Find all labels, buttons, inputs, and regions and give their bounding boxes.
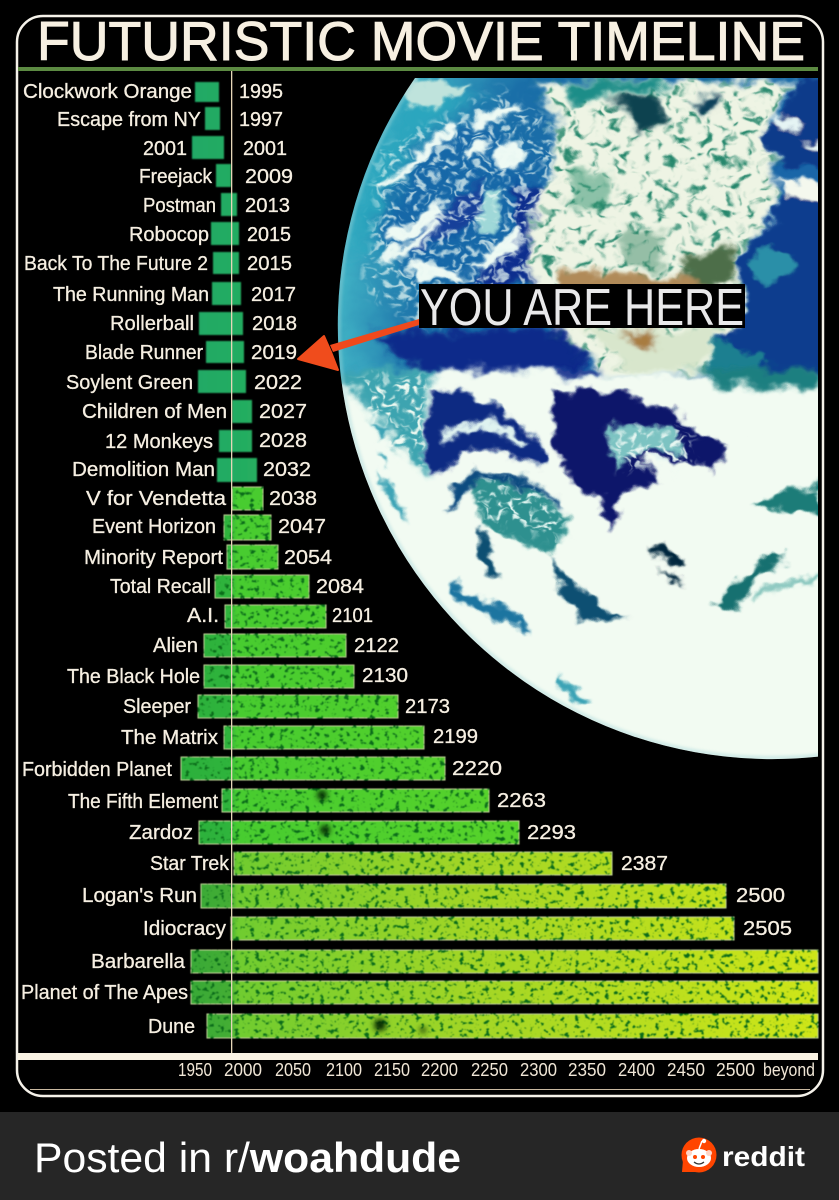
axis labels: 2300: [520, 1060, 557, 1080]
row: Children of Men: Children of Men: [82, 401, 227, 423]
row: Forbidden Planet: Forbidden Planet: [22, 759, 172, 781]
axis labels: beyond: [763, 1060, 815, 1080]
row: Forbidden Planet: 2220: [452, 758, 502, 780]
southern white cloud mass: [342, 360, 818, 760]
row: Event Horizon: Event Horizon: [92, 516, 216, 538]
row: Clockwork Orange: 1995: [239, 81, 283, 103]
green title rule: [18, 67, 818, 71]
white streaks in storms: [438, 412, 730, 474]
row: Back To The Future 2: [24, 252, 292, 275]
row: Minority Report: Minority Report: [84, 547, 223, 569]
row: Forbidden Planet: [22, 757, 502, 781]
row: 2001: 2001: [143, 138, 187, 160]
row: Total Recall: 2084: [316, 576, 364, 598]
row: Dune: [148, 1014, 818, 1038]
continent cloud base: [527, 82, 800, 375]
dark spots on bars: [317, 790, 426, 1033]
row: Logan's Run: Logan's Run: [82, 885, 197, 907]
row: Idiocracy: Idiocracy: [143, 918, 226, 940]
indian ocean: [703, 82, 827, 385]
axis labels: 2150: [374, 1060, 410, 1080]
title: FUTURISTIC MOVIE TIMELINE: [37, 10, 805, 72]
row: Sleeper: 2173: [405, 696, 450, 718]
row: Demolition Man: [72, 458, 311, 482]
timeline chart: [21, 81, 818, 1038]
limb teal patches: [370, 417, 590, 703]
swirl: [447, 473, 567, 557]
row: Alien: 2122: [354, 635, 399, 657]
row: The Running Man: The Running Man: [53, 284, 209, 306]
axis labels: 2100: [326, 1060, 362, 1080]
axis labels: 2000: [224, 1060, 262, 1080]
row: The Black Hole: The Black Hole: [67, 666, 200, 688]
limb cloud speckle: [350, 378, 430, 470]
north-west white cloud bands: [377, 82, 523, 283]
axis labels: 2250: [471, 1060, 508, 1080]
row: Postman: 2013: [245, 195, 290, 217]
axis labels: 2050: [275, 1060, 311, 1080]
row: The Running Man: [53, 282, 296, 306]
row: Star Trek: 2387: [621, 853, 668, 875]
north-west ocean, soft blues: [351, 90, 486, 280]
row: Rollerball: Rollerball: [110, 313, 194, 335]
row: Robocop: [129, 222, 291, 246]
row: Barbarella: [91, 950, 818, 973]
row: The Matrix: The Matrix: [121, 727, 218, 749]
row: Rollerball: [110, 312, 297, 335]
row: Minority Report: [84, 545, 332, 569]
row: Rollerball: 2018: [252, 313, 297, 335]
thin baseline: [30, 1089, 810, 1090]
row: Demolition Man: Demolition Man: [72, 459, 215, 481]
row: Zardoz: [129, 821, 576, 844]
row: The Matrix: [121, 726, 478, 749]
row: 12 Monkeys: [105, 430, 307, 453]
row: A.I.: [187, 605, 373, 628]
row: Escape from NY: [57, 107, 283, 131]
row: A.I.: 2101: [332, 605, 373, 627]
north-west deep blue seas: [372, 178, 585, 375]
row: Alien: Alien: [153, 635, 198, 657]
row: Freejack: [139, 164, 293, 188]
row: V for Vendetta: 2038: [269, 488, 317, 510]
row: Planet of The Apes: Planet of The Apes: [21, 982, 188, 1004]
row: V for Vendetta: V for Vendetta: [86, 488, 227, 510]
row: Zardoz: Zardoz: [129, 822, 193, 844]
row: The Fifth Element: 2263: [497, 790, 546, 812]
axis labels: 2200: [421, 1060, 458, 1080]
row: Escape from NY: 1997: [239, 109, 283, 131]
dark streaks: [453, 483, 820, 633]
row: Postman: Postman: [143, 195, 216, 217]
storm cloud speckle: [610, 430, 695, 470]
row: Blade Runner: Blade Runner: [85, 342, 203, 364]
icon: reddit logo: [682, 1138, 716, 1172]
row: The Running Man: 2017: [251, 284, 296, 306]
row: Children of Men: [82, 400, 307, 423]
row: Alien: [153, 634, 399, 657]
row: 2001: [143, 136, 287, 160]
row: Event Horizon: [92, 515, 326, 540]
row: Star Trek: Star Trek: [150, 853, 230, 875]
axis labels: [178, 1060, 815, 1080]
row: Barbarella: Barbarella: [91, 951, 186, 973]
axis bar: [18, 1053, 818, 1060]
row: Star Trek: [150, 852, 668, 875]
row: The Fifth Element: [68, 789, 546, 813]
row: Idiocracy: [143, 917, 792, 940]
row: Clockwork Orange: Clockwork Orange: [23, 81, 192, 103]
navy storm systems: [423, 387, 727, 530]
row: Soylent Green: Soylent Green: [66, 372, 193, 394]
axis labels: 1950: [178, 1060, 212, 1080]
reddit wordmark: reddit: [722, 1141, 805, 1172]
continent green speckle: [527, 82, 800, 375]
row: Sleeper: Sleeper: [123, 696, 191, 718]
axis labels: 2450: [667, 1060, 705, 1080]
row: Back To The Future 2: 2015: [247, 253, 292, 275]
continent details: [557, 82, 737, 375]
row: Zardoz: 2293: [527, 822, 576, 844]
row: Logan's Run: [82, 884, 785, 908]
row: Robocop: 2015: [247, 224, 291, 246]
row: Logan's Run: 2500: [736, 885, 785, 907]
earth photograph: [338, 78, 818, 760]
row: Freejack: Freejack: [139, 166, 213, 188]
row: 2001: 2001: [243, 138, 287, 160]
row: Soylent Green: [66, 370, 302, 394]
row: Soylent Green: 2022: [254, 372, 302, 394]
atmosphere rim: [338, 78, 818, 760]
row: The Matrix: 2199: [433, 726, 478, 748]
row: V for Vendetta: [86, 487, 317, 510]
row: Blade Runner: [85, 341, 297, 364]
row: Sleeper: [123, 695, 450, 718]
row: Planet of The Apes: [21, 981, 818, 1004]
row: 12 Monkeys: 12 Monkeys: [105, 431, 213, 453]
row: A.I.: A.I.: [187, 605, 219, 627]
row: Freejack: 2009: [245, 166, 293, 188]
arrow: [298, 319, 419, 370]
row: 12 Monkeys: 2028: [259, 430, 307, 452]
row: Clockwork Orange: [23, 81, 283, 103]
footer bar: [0, 1112, 839, 1200]
row: Idiocracy: 2505: [743, 918, 792, 940]
row: Postman: [143, 193, 290, 217]
ocean base: [338, 78, 818, 382]
row: Event Horizon: 2047: [278, 516, 326, 538]
row: The Black Hole: [67, 665, 408, 688]
row: Total Recall: Total Recall: [110, 576, 211, 598]
row: Minority Report: 2054: [284, 547, 332, 569]
present-day vertical line: [231, 71, 232, 1053]
row: Back To The Future 2: Back To The Future 2: [24, 253, 208, 275]
row: Total Recall: [110, 575, 364, 598]
swirl cloud speckle: [480, 482, 565, 545]
axis labels: 2400: [618, 1060, 655, 1080]
axis labels: 2350: [568, 1060, 606, 1080]
row: Blade Runner: 2019: [251, 342, 297, 364]
row: Robocop: Robocop: [129, 224, 209, 246]
row: Escape from NY: Escape from NY: [57, 109, 201, 131]
callout: you are here: YOU ARE HERE: [420, 279, 744, 337]
western limb teal and cloud: [340, 368, 820, 483]
row: The Black Hole: 2130: [362, 665, 408, 687]
row: Dune: Dune: [148, 1016, 195, 1038]
row: Demolition Man: 2032: [263, 459, 311, 481]
row: Children of Men: 2027: [259, 401, 307, 423]
footer text: Posted in r/woahdude: [34, 1134, 461, 1181]
north-west cloud speckle: [365, 90, 560, 325]
row: The Fifth Element: The Fifth Element: [68, 791, 218, 813]
axis labels: 2500: [716, 1060, 755, 1080]
earth surface detail: [338, 78, 818, 760]
